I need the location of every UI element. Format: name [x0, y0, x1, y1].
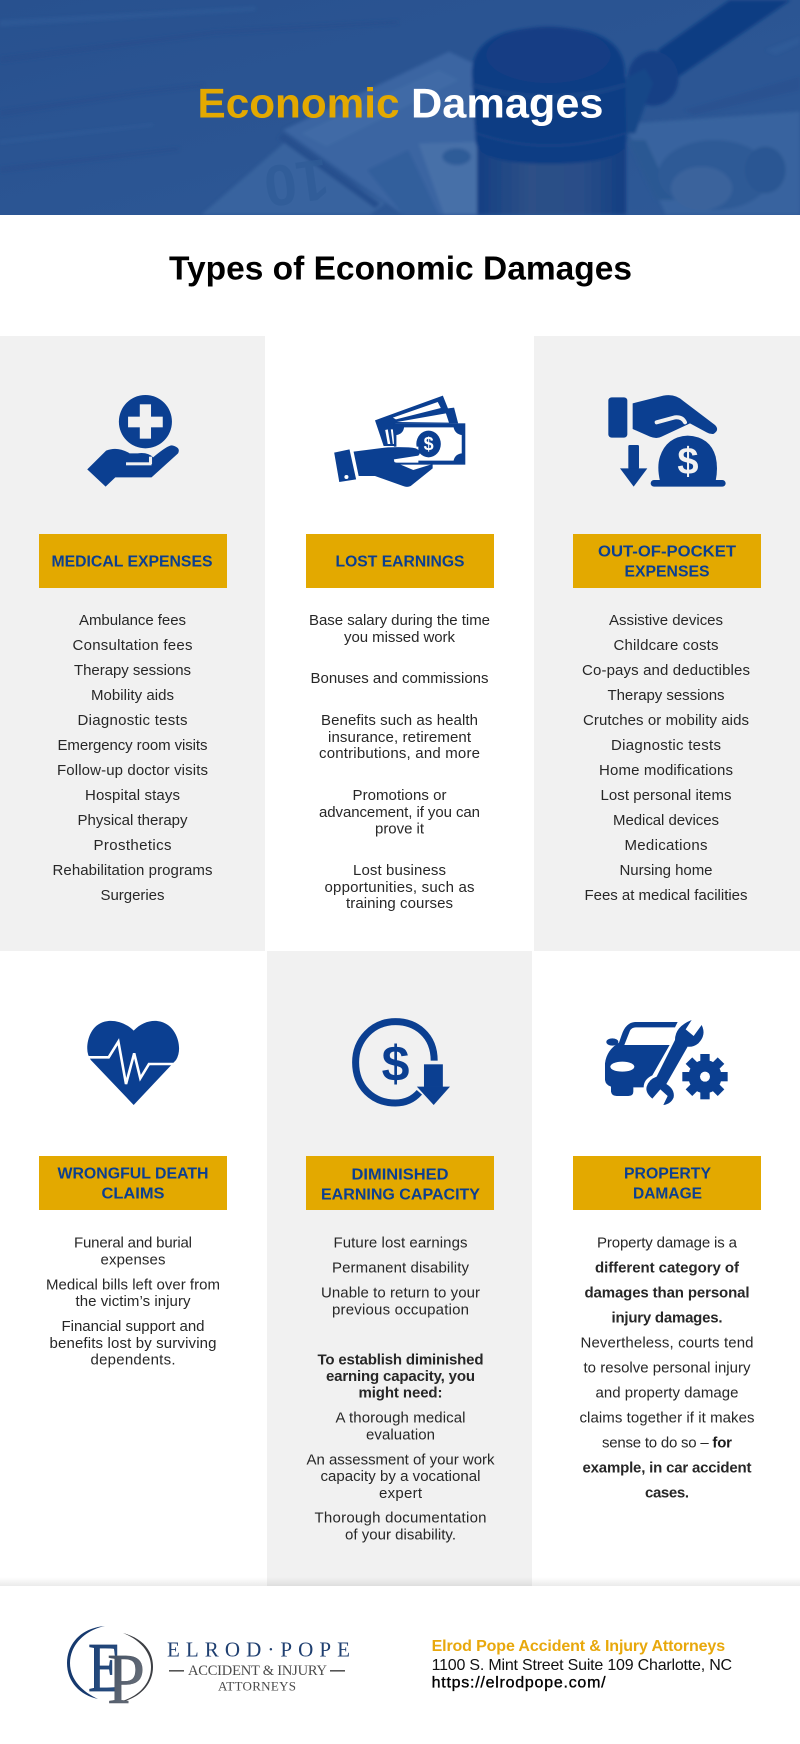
list: out-of-pocket expenses: Co-pays and deductibles: [582, 662, 750, 679]
list: medical expenses: Therapy sessions: [74, 662, 191, 679]
list: out-of-pocket expenses: Therapy sessions: [608, 687, 724, 704]
list: out-of-pocket expenses: Fees at medical facilities: [584, 887, 748, 904]
text: property damage explanation: and property damage: [596, 1385, 738, 1402]
text: property damage explanation: Property damage is a: [597, 1235, 738, 1252]
list: medical expenses: [52, 612, 212, 904]
list: diminished earning capacity: Permanent disability: [332, 1260, 470, 1277]
logo: Elrod Pope: ATTORNEYS: [218, 1679, 296, 1694]
text: property damage explanation: [580, 1235, 754, 1502]
list: diminished earning capacity: evaluation: [366, 1427, 435, 1444]
section heading: Types of Economic Damages: [169, 250, 632, 286]
list: lost earnings: training courses: [346, 895, 453, 912]
list: medical expenses: Diagnostic tests: [78, 712, 188, 729]
text: property damage explanation: claims together if it makes: [580, 1410, 754, 1427]
list: medical expenses: Surgeries: [100, 887, 164, 904]
list: diminished earning capacity: earning capacity, you: [326, 1368, 475, 1385]
list: lost earnings: opportunities, such as: [324, 879, 474, 896]
list: diminished earning capacity: of your disability.: [345, 1527, 456, 1544]
list: out-of-pocket expenses: Diagnostic tests: [611, 737, 721, 754]
heading: diminished earning capacity: EARNING CAPACITY: [321, 1186, 480, 1203]
text: property damage explanation: sense to do so – for: [602, 1435, 732, 1452]
list: out-of-pocket expenses: Crutches or mobility aids: [583, 712, 749, 729]
list: medical expenses: Consultation fees: [72, 637, 192, 654]
list: wrongful death claims: the victim’s injury: [76, 1293, 191, 1310]
text: property damage explanation: damages than personal: [584, 1285, 750, 1302]
list: out-of-pocket expenses: Nursing home: [620, 862, 712, 879]
list: lost earnings: Benefits such as health: [321, 712, 478, 729]
icon: hand holding medical cross: [87, 395, 179, 487]
list: diminished earning capacity: [306, 1235, 495, 1544]
icon: heart with pulse: [86, 1021, 180, 1105]
text: property damage explanation: Nevertheless, courts tend: [580, 1335, 754, 1352]
heading: property damage: DAMAGE: [633, 1185, 702, 1202]
text: property damage explanation: different category of: [595, 1260, 740, 1277]
list: lost earnings: prove it: [375, 820, 425, 837]
contact details: 1100 S. Mint Street Suite 109 Charlotte, NC: [432, 1657, 732, 1674]
panel: property damage: [532, 951, 800, 1586]
hero banner: gavel and banknotes: [0, 0, 800, 219]
panel: out-of-pocket expenses: [534, 336, 800, 951]
heading: diminished earning capacity: [306, 1156, 494, 1210]
heading: property damage: PROPERTY: [624, 1165, 711, 1182]
heading: property damage: [573, 1156, 761, 1210]
list: medical expenses: Ambulance fees: [79, 612, 186, 629]
list: lost earnings: Bonuses and commissions: [310, 670, 488, 687]
list: wrongful death claims: [46, 1235, 220, 1369]
heading: medical expenses: MEDICAL EXPENSES: [52, 553, 213, 570]
heading: diminished earning capacity: DIMINISHED: [352, 1166, 448, 1183]
list: lost earnings: Promotions or: [352, 787, 446, 804]
panel: medical expenses: [0, 336, 265, 951]
list: out-of-pocket expenses: Childcare costs: [614, 637, 718, 654]
list: medical expenses: Emergency room visits: [58, 737, 208, 754]
icon: dollar with down arrow: $: [382, 1036, 410, 1092]
text: property damage explanation: to resolve personal injury: [584, 1360, 751, 1377]
list: diminished earning capacity: To establish diminished: [318, 1352, 484, 1369]
list: lost earnings: insurance, retirement: [328, 729, 472, 746]
list: diminished earning capacity: Thorough documentation: [314, 1510, 486, 1527]
icon: hand with banknotes: [334, 396, 465, 487]
heading: out-of-pocket expenses: [573, 534, 761, 588]
contact details: [432, 1638, 732, 1692]
panel: lost earnings: [265, 336, 534, 951]
icon: hand over coin with down arrow: [608, 395, 726, 487]
text: property damage explanation: injury damages.: [612, 1310, 722, 1327]
logo: Elrod Pope: ACCIDENT & INJURY: [188, 1663, 328, 1679]
list: wrongful death claims: Financial support and: [62, 1318, 204, 1335]
logo: Elrod Pope: P: [107, 1639, 145, 1719]
list: medical expenses: Prosthetics: [94, 837, 172, 854]
list: diminished earning capacity: Future lost earnings: [334, 1235, 468, 1252]
icon: hand over coin with down arrow: $: [677, 441, 699, 483]
heading: medical expenses: [39, 534, 227, 588]
icon: car, wrench and gear: [605, 1020, 728, 1105]
list: lost earnings: Base salary during the time: [309, 612, 490, 629]
icon: dollar with down arrow: [356, 1022, 450, 1105]
list: wrongful death claims: benefits lost by surviving: [50, 1335, 216, 1352]
list: out-of-pocket expenses: [582, 612, 750, 904]
list: medical expenses: Physical therapy: [78, 812, 188, 829]
list: out-of-pocket expenses: Assistive devices: [609, 612, 723, 629]
contact details: https://elrodpope.com/: [432, 1675, 606, 1692]
heading: out-of-pocket expenses: OUT-OF-POCKET: [598, 543, 736, 560]
list: wrongful death claims: expenses: [100, 1252, 166, 1269]
title: Economic: [198, 80, 400, 127]
footer: [0, 1577, 800, 1744]
heading: wrongful death claims: WRONGFUL DEATH: [58, 1165, 208, 1182]
list: out-of-pocket expenses: Medical devices: [613, 812, 719, 829]
heading: wrongful death claims: [39, 1156, 227, 1210]
logo: Elrod Pope: [67, 1626, 350, 1719]
list: out-of-pocket expenses: Home modifications: [599, 762, 733, 779]
list: medical expenses: Rehabilitation programs: [52, 862, 212, 879]
list: medical expenses: Mobility aids: [91, 687, 174, 704]
list: lost earnings: you missed work: [344, 629, 456, 646]
list: wrongful death claims: dependents.: [90, 1352, 176, 1369]
heading: out-of-pocket expenses: EXPENSES: [624, 563, 710, 580]
banknote numeral: 10: [260, 146, 333, 219]
list: wrongful death claims: Funeral and burial: [74, 1235, 192, 1252]
list: lost earnings: Lost business: [353, 862, 446, 879]
list: diminished earning capacity: expert: [379, 1485, 423, 1502]
panel: wrongful death claims: [0, 951, 267, 1586]
list: lost earnings: advancement, if you can: [319, 804, 480, 821]
text: property damage explanation: example, in car accident: [582, 1460, 752, 1477]
heading: lost earnings: [306, 534, 494, 588]
list: diminished earning capacity: capacity by a vocational: [320, 1468, 480, 1485]
list: diminished earning capacity: Unable to return to your: [321, 1285, 480, 1302]
panel: diminished earning capacity: [267, 951, 532, 1586]
list: wrongful death claims: Medical bills left over from: [46, 1277, 220, 1294]
text: property damage explanation: cases.: [645, 1485, 689, 1502]
list: diminished earning capacity: A thorough medical: [336, 1410, 466, 1427]
list: medical expenses: Hospital stays: [85, 787, 180, 804]
list: diminished earning capacity: An assessment of your work: [306, 1452, 495, 1469]
list: diminished earning capacity: might need:: [358, 1385, 442, 1402]
contact details: Elrod Pope Accident & Injury Attorneys: [432, 1638, 725, 1655]
logo: Elrod Pope: E: [88, 1630, 122, 1707]
logo: Elrod Pope: ELROD·POPE: [167, 1638, 350, 1662]
title: [200, 87, 602, 126]
list: medical expenses: Follow-up doctor visits: [57, 762, 208, 779]
list: out-of-pocket expenses: Medications: [624, 837, 708, 854]
heading: lost earnings: LOST EARNINGS: [336, 553, 465, 570]
list: lost earnings: contributions, and more: [319, 745, 480, 762]
title: Damages: [411, 80, 604, 127]
icon: hand with banknotes: $: [424, 434, 434, 454]
list: out-of-pocket expenses: Lost personal items: [600, 787, 732, 804]
heading: wrongful death claims: CLAIMS: [102, 1185, 165, 1202]
list: lost earnings: [309, 612, 490, 912]
list: diminished earning capacity: previous occupation: [332, 1302, 469, 1319]
